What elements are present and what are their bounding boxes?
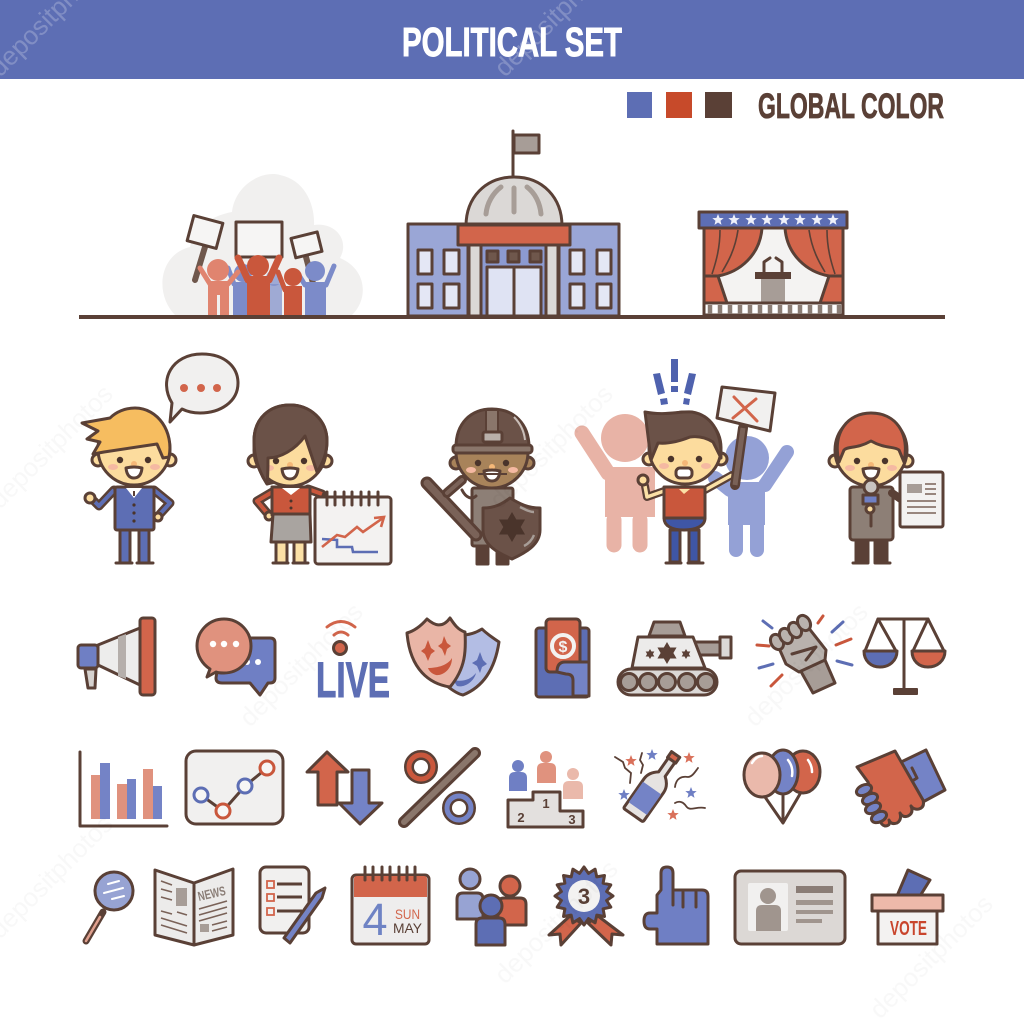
dark hair — [645, 412, 721, 460]
watermarks: depositphotos — [863, 889, 999, 1024]
windows — [418, 250, 611, 308]
coat — [850, 487, 893, 540]
chart board — [315, 492, 391, 564]
exclamation marks — [653, 359, 696, 405]
suit — [115, 487, 154, 530]
helmet — [453, 409, 532, 453]
head — [643, 412, 727, 484]
scene: debate stage — [699, 212, 847, 315]
rays — [757, 616, 852, 686]
sleeve — [892, 493, 905, 502]
mouth — [863, 468, 879, 479]
cloud background — [162, 174, 363, 315]
mouth — [484, 470, 500, 481]
icon: calendar: SUN — [395, 906, 420, 922]
legs — [853, 538, 890, 563]
header watermarks — [0, 0, 615, 82]
legs — [666, 530, 703, 563]
icon: calendar — [352, 867, 429, 945]
watermarks: depositphotos — [483, 379, 619, 514]
curtains — [704, 228, 843, 303]
icon: magnifying glass — [86, 872, 133, 941]
top and skirt — [271, 487, 311, 542]
blue protesters — [228, 261, 334, 315]
star banner — [699, 212, 847, 228]
icon: line graph — [186, 751, 283, 824]
icon: award rosette: 3 — [578, 884, 590, 909]
scene: protest crowd — [162, 174, 363, 315]
icon: ID card — [735, 871, 845, 944]
icon: ballot box — [872, 870, 943, 944]
back hair — [254, 405, 327, 484]
scene: capitol building — [408, 131, 619, 316]
icon: chat bubbles — [197, 619, 275, 695]
icon: up and down arrows — [307, 752, 382, 824]
watermarks: depositphotos — [233, 597, 369, 732]
icon: balance scales — [864, 619, 945, 695]
red pediment — [458, 225, 570, 245]
icon: raised fist — [757, 613, 852, 693]
icon: tank — [618, 622, 731, 695]
red protesters — [200, 255, 302, 315]
title: POLITICAL SET — [402, 19, 622, 65]
moustache — [478, 473, 507, 475]
mouth — [282, 468, 298, 479]
watermarks — [0, 379, 999, 1024]
icon: percent sign — [404, 753, 475, 822]
legs — [116, 530, 153, 563]
arms — [638, 475, 732, 497]
icon: checklist with pencil — [260, 867, 325, 943]
character: reporter — [829, 413, 943, 563]
podium — [755, 258, 791, 303]
signs — [187, 216, 322, 287]
icon: champagne bottle — [615, 748, 705, 822]
microphone — [863, 480, 878, 526]
icon: live broadcast — [316, 622, 390, 708]
legs — [273, 540, 308, 563]
icon: balloons — [744, 750, 820, 823]
head — [92, 413, 176, 485]
icon: bribe money — [536, 619, 589, 697]
icon: megaphone — [78, 618, 155, 695]
swatch: blue — [627, 92, 652, 118]
dome — [466, 177, 562, 226]
paper — [900, 472, 943, 527]
centre wing — [468, 245, 559, 316]
main building — [408, 224, 619, 316]
gritted mouth — [676, 468, 692, 478]
ground line — [79, 315, 945, 319]
watermarks: depositphotos — [488, 854, 624, 989]
stage backdrop — [704, 226, 843, 315]
icon: podium: 3 — [568, 812, 576, 827]
icon: handshake — [855, 750, 945, 826]
ghost protester: pink — [582, 414, 655, 545]
icon: foam finger — [644, 867, 708, 944]
icon: bribe money: $ — [559, 639, 568, 656]
swatch: brown — [705, 92, 732, 118]
shirt and shorts — [664, 487, 705, 530]
header banner — [0, 0, 1024, 79]
arms — [85, 490, 170, 521]
flag — [513, 131, 539, 176]
uniform — [472, 488, 513, 546]
head — [450, 416, 534, 488]
icon: newspaper: NEWS — [196, 883, 227, 904]
icon: podium — [508, 751, 583, 827]
ghost protester: blue — [715, 436, 787, 550]
boots — [477, 545, 508, 564]
head — [829, 414, 913, 486]
icon: bar chart — [80, 752, 167, 826]
character: woman with chart — [248, 405, 391, 564]
stage floor stripes — [704, 303, 843, 315]
icon: live broadcast: LIVE — [316, 652, 390, 708]
icon: calendar: 4 — [362, 894, 388, 945]
icon: podium: 1 — [542, 796, 550, 811]
icon: ballot box: VOTE — [890, 918, 927, 940]
icon: podium: 2 — [517, 810, 525, 825]
icon: newspaper — [155, 869, 233, 945]
character: angry protester group — [582, 359, 787, 563]
shield — [483, 498, 540, 559]
watermarks: depositphotos — [738, 597, 874, 732]
swatch: red — [666, 92, 692, 118]
placard — [717, 387, 775, 485]
blond hair — [82, 408, 170, 458]
icon: award rosette — [549, 867, 623, 945]
mouth — [126, 467, 142, 478]
icon: group of people — [457, 869, 526, 945]
character: blond politician — [82, 354, 238, 563]
head — [248, 414, 332, 486]
icon: theatre masks — [407, 618, 499, 695]
speech bubble — [167, 354, 238, 422]
baton — [427, 480, 476, 535]
red hair — [837, 413, 905, 462]
arms — [257, 489, 322, 520]
icon: calendar: MAY — [393, 920, 423, 936]
colour legend — [627, 87, 944, 126]
hair fringe — [254, 405, 327, 484]
character: riot police — [427, 409, 540, 564]
